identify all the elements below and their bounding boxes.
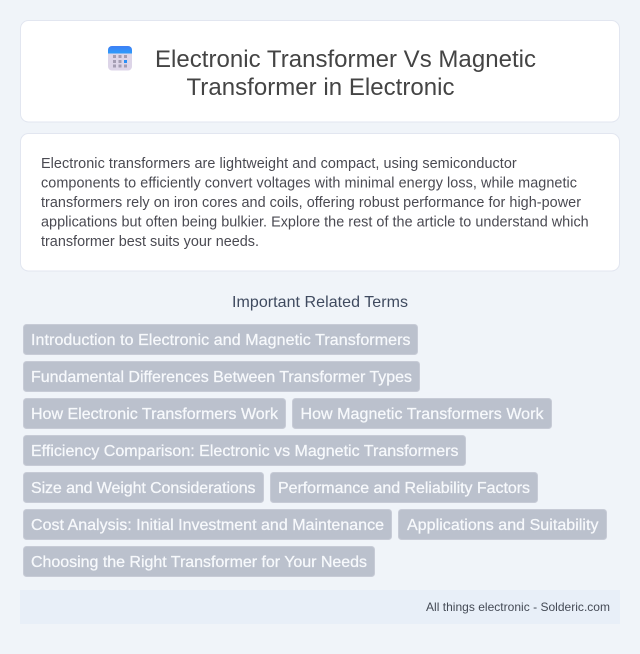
footer: [20, 590, 620, 624]
tag: Size and Weight Considerations: [31, 480, 256, 497]
footer credit: All things electronic - Solderic.com: [426, 600, 610, 614]
section heading: related terms: Important Related Terms: [232, 294, 408, 311]
related term tags: [24, 324, 606, 576]
tag: Introduction to Electronic and Magnetic Transformers: [31, 332, 410, 349]
tag: [24, 398, 286, 428]
intro text block: Electronic transformers are lightweight and compact, using semiconductor: [41, 156, 517, 172]
tag: Efficiency Comparison: Electronic vs Magnetic Transformers: [31, 443, 458, 460]
intro text block: transformer best suits your needs.: [41, 234, 259, 250]
tag: [24, 472, 264, 502]
tag: Cost Analysis: Initial Investment and Maintenance: [31, 517, 384, 534]
intro text block: applications but often being bulkier. Explore the rest of the article to understand which: [41, 214, 589, 230]
tag: Performance and Reliability Factors: [278, 480, 530, 497]
heading: Transformer in Electronic: [186, 74, 454, 101]
tag: Choosing the Right Transformer for Your Needs: [31, 554, 367, 571]
tag: [398, 510, 606, 540]
panel: introduction: [20, 134, 620, 271]
tag: How Magnetic Transformers Work: [300, 406, 544, 423]
intro text block: components to efficiently convert voltages with minimal energy loss, while magnetic: [41, 176, 577, 192]
tag: How Electronic Transformers Work: [31, 406, 279, 423]
tag: [24, 436, 466, 466]
tag: [270, 472, 538, 502]
tag: [292, 398, 552, 428]
icon: calendar: [108, 46, 132, 70]
tag: [24, 324, 418, 354]
intro text block: [41, 156, 589, 250]
panel: title: [20, 20, 620, 122]
heading: Electronic Transformer Vs Magnetic: [155, 46, 536, 73]
tag: Fundamental Differences Between Transformer Types: [31, 369, 412, 386]
tag: Applications and Suitability: [407, 517, 598, 534]
tag: [24, 510, 392, 540]
tag: [24, 362, 420, 392]
heading: [155, 46, 536, 101]
intro text block: transformers rely on iron cores and coils, offering robust performance for high-power: [41, 195, 581, 211]
tag: [24, 546, 374, 576]
